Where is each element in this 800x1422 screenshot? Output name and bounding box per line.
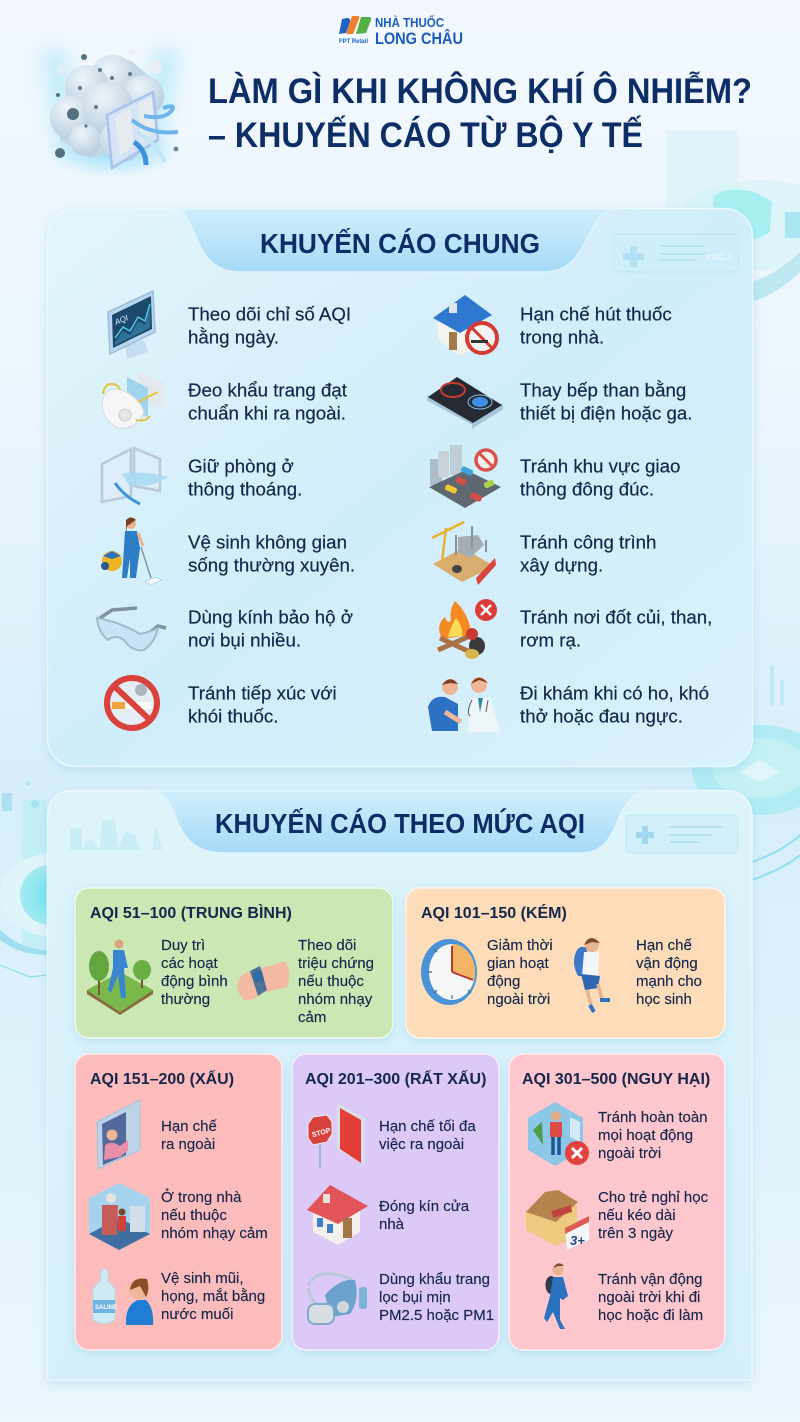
text: school closure: trên 3 ngày bbox=[598, 1225, 674, 1242]
decoration: top-right shield and platform bbox=[666, 130, 800, 302]
card: AQI 101-150 bbox=[406, 888, 725, 1038]
icon: hybrid stove bbox=[428, 377, 502, 427]
icon: open window bbox=[102, 448, 168, 504]
item: avoid burning bbox=[438, 599, 712, 659]
icon: AQI monitor bbox=[108, 291, 155, 359]
text: fine dust mask: lọc bụi mịn bbox=[379, 1289, 451, 1306]
text: limit going out: Hạn chế bbox=[161, 1118, 218, 1135]
item: monitor AQI: hằng ngày. bbox=[188, 326, 279, 348]
item: clean living space: Vệ sinh không gian bbox=[188, 532, 347, 552]
item: no smoking indoors bbox=[433, 295, 672, 355]
text: stay indoors: Ở trong nhà bbox=[161, 1188, 242, 1206]
icon: saline and child: SALINE bbox=[95, 1305, 117, 1311]
logo bbox=[339, 15, 463, 48]
item: monitor AQI: Theo dõi chỉ số AQI bbox=[188, 304, 351, 324]
item: avoid construction: Tránh công trình bbox=[520, 532, 656, 552]
card: AQI 51-100: AQI 51–100 (TRUNG BÌNH) bbox=[90, 903, 292, 922]
text: fine dust mask: Dùng khẩu trang bbox=[379, 1271, 490, 1288]
decoration: lower-right rings bbox=[692, 665, 800, 880]
text: avoid outdoor exercise: ngoài trời khi đi bbox=[598, 1289, 700, 1306]
text: avoid outdoor exercise: Tránh vận động bbox=[598, 1271, 703, 1288]
text: monitor symptoms: nhóm nhạy bbox=[298, 991, 373, 1008]
item: ventilate room bbox=[102, 448, 302, 504]
item: clean living space bbox=[101, 518, 355, 585]
text: saline rinse: họng, mắt bằng bbox=[161, 1288, 265, 1305]
text: monitor symptoms: cảm bbox=[298, 1009, 326, 1026]
text: school closure bbox=[598, 1189, 709, 1242]
item: clean living space: sống thường xuyên. bbox=[188, 554, 355, 576]
item: avoid burning: Tránh nơi đốt củi, than, bbox=[520, 606, 712, 628]
item: replace charcoal stove: thiết bị điện hoặc ga. bbox=[520, 402, 692, 424]
card: AQI 201-300 bbox=[292, 1054, 499, 1350]
text: school closure: nếu kéo dài bbox=[598, 1207, 676, 1224]
item: protective glasses: nơi bụi nhiều. bbox=[188, 630, 301, 650]
text: limit going out bbox=[161, 1118, 218, 1153]
text: avoid outdoor exercise: học hoặc đi làm bbox=[598, 1307, 703, 1324]
card: AQI 201-300: AQI 201–300 (RẤT XẤU) bbox=[305, 1069, 486, 1088]
text: avoid outdoor activity: Tránh hoàn toàn bbox=[598, 1109, 708, 1126]
text: close doors: Đóng kín cửa bbox=[379, 1198, 470, 1215]
item: see a doctor bbox=[428, 677, 709, 732]
item: protective glasses: Dùng kính bảo hộ ở bbox=[188, 606, 353, 628]
text: avoid outdoor activity: mọi hoạt động bbox=[598, 1127, 693, 1144]
item: replace charcoal stove bbox=[428, 377, 692, 427]
text: avoid outdoor exercise bbox=[598, 1271, 703, 1324]
text: saline rinse: nước muối bbox=[161, 1306, 233, 1323]
text: monitor symptoms: nếu thuộc bbox=[298, 973, 364, 990]
card: AQI 101-150: AQI 101–150 (KÉM) bbox=[421, 903, 567, 922]
icon: closed school and calendar bbox=[526, 1190, 589, 1250]
heading tab: general recommendations: KHUYẾN CÁO CHUNG bbox=[260, 228, 540, 259]
icon: house no smoking bbox=[433, 295, 497, 355]
icon: stay in room bbox=[89, 1183, 150, 1250]
item: avoid traffic bbox=[429, 445, 680, 508]
item: wear a mask: Đeo khẩu trang đạt bbox=[188, 380, 348, 400]
item: avoid burning: rơm rạ. bbox=[520, 630, 581, 650]
icon: safety goggles bbox=[97, 608, 166, 650]
icon: no smoking bbox=[107, 678, 157, 728]
icon: filter mask bbox=[102, 372, 163, 428]
text: keep normal activity: động bình bbox=[161, 973, 228, 990]
text: reduce outdoor time: ngoài trời bbox=[487, 991, 550, 1008]
logo: LONG CHÂU bbox=[375, 29, 463, 48]
title bbox=[208, 71, 752, 155]
text: limit exercise bbox=[636, 937, 702, 1008]
card: AQI 151-200: AQI 151–200 (XẤU) bbox=[90, 1069, 234, 1088]
item: wear a mask bbox=[102, 372, 348, 428]
text: limit going out: ra ngoài bbox=[161, 1136, 215, 1153]
heading tab: by AQI level bbox=[152, 791, 648, 853]
medical card decoration bbox=[626, 815, 738, 853]
text: reduce outdoor time: gian hoạt bbox=[487, 955, 550, 972]
item: avoid traffic: Tránh khu vực giao bbox=[520, 456, 680, 476]
item: monitor AQI bbox=[108, 291, 351, 359]
text: keep normal activity: thường bbox=[161, 991, 210, 1008]
text: stay indoors bbox=[161, 1188, 268, 1242]
icon: saline and child bbox=[93, 1268, 153, 1325]
text: avoid outdoor activity bbox=[598, 1109, 708, 1162]
medical card decoration: PM2.5 bbox=[706, 252, 732, 262]
icon: congested city bbox=[429, 445, 501, 508]
illustration: polluted cloud passing an air filter bbox=[42, 48, 180, 178]
text: limit exercise: Hạn chế bbox=[636, 937, 693, 954]
icon: closed house bbox=[307, 1185, 368, 1245]
text: limit going out bbox=[379, 1118, 476, 1153]
text: fine dust mask: PM2.5 hoặc PM1 bbox=[379, 1307, 494, 1324]
item: see a doctor: thở hoặc đau ngực. bbox=[520, 706, 683, 726]
item: protective glasses bbox=[97, 606, 353, 650]
title: – KHUYẾN CÁO TỪ BỘ Y TẾ bbox=[208, 115, 643, 155]
item: no smoking indoors: trong nhà. bbox=[520, 326, 604, 348]
text: limit exercise: học sinh bbox=[636, 991, 692, 1008]
item: avoid smoke: Tránh tiếp xúc với bbox=[188, 682, 337, 704]
icon: closed school and calendar: 3+ bbox=[570, 1233, 585, 1248]
icon: clock bbox=[421, 939, 477, 1005]
text: reduce outdoor time: động bbox=[487, 973, 520, 990]
skyline decoration bbox=[70, 820, 172, 850]
item: avoid construction: xây dựng. bbox=[520, 554, 603, 576]
icon: walking in park bbox=[87, 940, 153, 1015]
card: AQI 301-500: AQI 301–500 (NGUY HẠI) bbox=[522, 1071, 710, 1088]
text: saline rinse: Vệ sinh mũi, bbox=[161, 1270, 244, 1287]
text: stay indoors: nhóm nhạy cảm bbox=[161, 1225, 268, 1242]
icon: room with x badge bbox=[528, 1102, 589, 1166]
heading tab: general recommendations bbox=[175, 209, 615, 272]
item: avoid smoke bbox=[107, 678, 337, 728]
panel: general recommendations bbox=[48, 208, 752, 766]
text: reduce outdoor time bbox=[487, 937, 553, 1008]
icon: respirator bbox=[308, 1274, 367, 1324]
text: keep normal activity: Duy trì bbox=[161, 937, 205, 954]
text: keep normal activity: các hoạt bbox=[161, 955, 219, 972]
item: replace charcoal stove: Thay bếp than bằng bbox=[520, 380, 686, 400]
icon: stop sign and door bbox=[308, 1103, 365, 1168]
text: close doors: nhà bbox=[379, 1216, 405, 1233]
card: AQI 51-100 bbox=[75, 888, 393, 1038]
text: monitor symptoms bbox=[298, 937, 374, 1026]
icon: construction site bbox=[432, 522, 496, 585]
text: limit going out: việc ra ngoài bbox=[379, 1136, 464, 1153]
text: monitor symptoms: triệu chứng bbox=[298, 955, 374, 972]
item: see a doctor: Đi khám khi có ho, khó bbox=[520, 682, 709, 704]
text: close doors bbox=[379, 1198, 470, 1233]
logo: FPT Retail bbox=[339, 38, 368, 45]
icon: woman at window bbox=[97, 1100, 140, 1169]
icon: AQI monitor: AQI bbox=[112, 313, 130, 327]
text: school closure: Cho trẻ nghỉ học bbox=[598, 1189, 709, 1206]
logo: NHÀ THUỐC bbox=[375, 15, 445, 30]
medical card decoration bbox=[614, 234, 738, 272]
icon: patient and doctor bbox=[428, 677, 500, 732]
text: monitor symptoms: Theo dõi bbox=[298, 937, 356, 954]
icon: smart wristband bbox=[237, 961, 289, 1000]
heading tab: by AQI level: KHUYẾN CÁO THEO MỨC AQI bbox=[215, 808, 585, 839]
text: fine dust mask bbox=[379, 1271, 494, 1324]
icon: fire with x badge bbox=[438, 599, 497, 659]
icon: person mopping bbox=[101, 518, 162, 585]
item: wear a mask: chuẩn khi ra ngoài. bbox=[188, 402, 346, 424]
item: ventilate room: Giữ phòng ở bbox=[188, 456, 294, 476]
item: avoid smoke: khói thuốc. bbox=[188, 706, 278, 726]
item: avoid traffic: thông đông đúc. bbox=[520, 478, 654, 500]
card: AQI 301-500 bbox=[509, 1054, 725, 1350]
title: LÀM GÌ KHI KHÔNG KHÍ Ô NHIỄM? bbox=[208, 71, 752, 111]
text: avoid outdoor activity: ngoài trời bbox=[598, 1145, 661, 1162]
icon: stop sign and door: STOP bbox=[311, 1127, 332, 1139]
text: limit exercise: vận động bbox=[636, 955, 698, 972]
decoration: left city and rings bbox=[0, 780, 110, 977]
icon: walking student bbox=[544, 1263, 568, 1329]
text: keep normal activity bbox=[161, 937, 228, 1008]
text: limit exercise: mạnh cho bbox=[636, 973, 702, 990]
panel: recommendations by AQI level bbox=[48, 790, 752, 1380]
item: ventilate room: thông thoáng. bbox=[188, 478, 302, 500]
text: stay indoors: nếu thuộc bbox=[161, 1207, 227, 1224]
card: AQI 151-200 bbox=[75, 1054, 282, 1350]
item: avoid construction bbox=[432, 522, 656, 585]
item: no smoking indoors: Hạn chế hút thuốc bbox=[520, 304, 672, 324]
text: limit going out: Hạn chế tối đa bbox=[379, 1118, 476, 1135]
icon: resting student bbox=[574, 938, 610, 1012]
text: reduce outdoor time: Giảm thời bbox=[487, 937, 553, 954]
text: saline rinse bbox=[161, 1270, 265, 1323]
